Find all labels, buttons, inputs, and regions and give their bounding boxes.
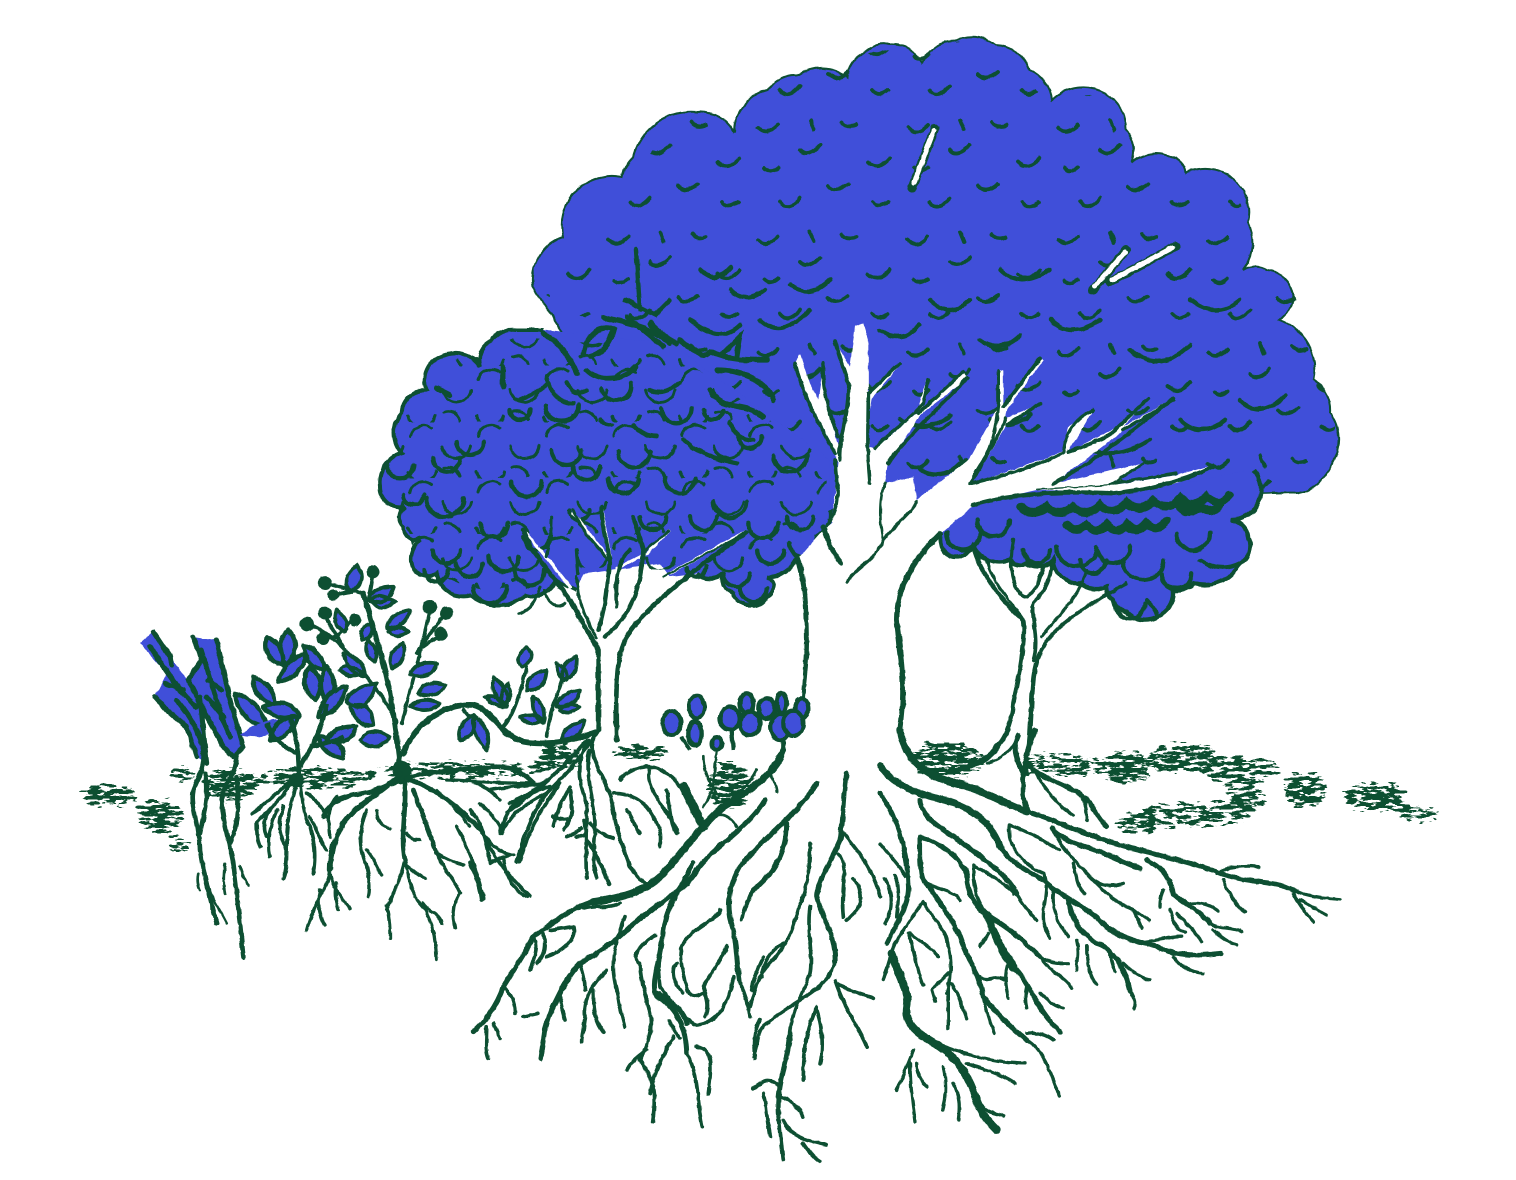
trunk fill: large tree xyxy=(795,323,1213,800)
plant: leafy sapling xyxy=(299,565,453,780)
plant: bush xyxy=(235,630,357,787)
low flower cluster xyxy=(662,693,808,750)
canopy: left tree xyxy=(380,317,830,605)
large tree trunk and branches xyxy=(795,323,1213,800)
small plants xyxy=(140,565,597,960)
roots: left tree left side xyxy=(502,733,597,878)
root branches left xyxy=(473,773,847,1113)
canopy marks: large tree lower band xyxy=(625,250,1285,474)
roots: large tree left and center xyxy=(470,740,880,1162)
main roots right xyxy=(900,730,1027,812)
left tree branch highlights xyxy=(527,510,745,587)
right root branches xyxy=(880,770,1293,1040)
left tree trunk and branches xyxy=(518,507,807,740)
left tree root fans xyxy=(470,740,703,900)
roots: sapling xyxy=(307,767,533,960)
canopy: right tree xyxy=(941,470,1261,620)
trunk and branch outlines: large tree xyxy=(795,342,1213,730)
roots: bush xyxy=(252,777,327,878)
canopy scallop arcs: left tree xyxy=(387,377,817,603)
left tree branch outlines xyxy=(518,507,807,740)
canopy: large tree xyxy=(532,37,1339,540)
plant: tall seedlings xyxy=(140,632,248,957)
ground texture xyxy=(76,738,1444,855)
canopy heavy marks: overlap with large tree xyxy=(437,317,773,417)
plant: creeping vine xyxy=(403,647,597,753)
roots: large tree right xyxy=(880,730,1340,1130)
main root left xyxy=(593,750,783,902)
right tree trunk and branches xyxy=(973,540,1127,765)
canopy heavy band: right tree xyxy=(1020,495,1230,530)
upper branch glimpses: large tree xyxy=(912,128,1176,290)
